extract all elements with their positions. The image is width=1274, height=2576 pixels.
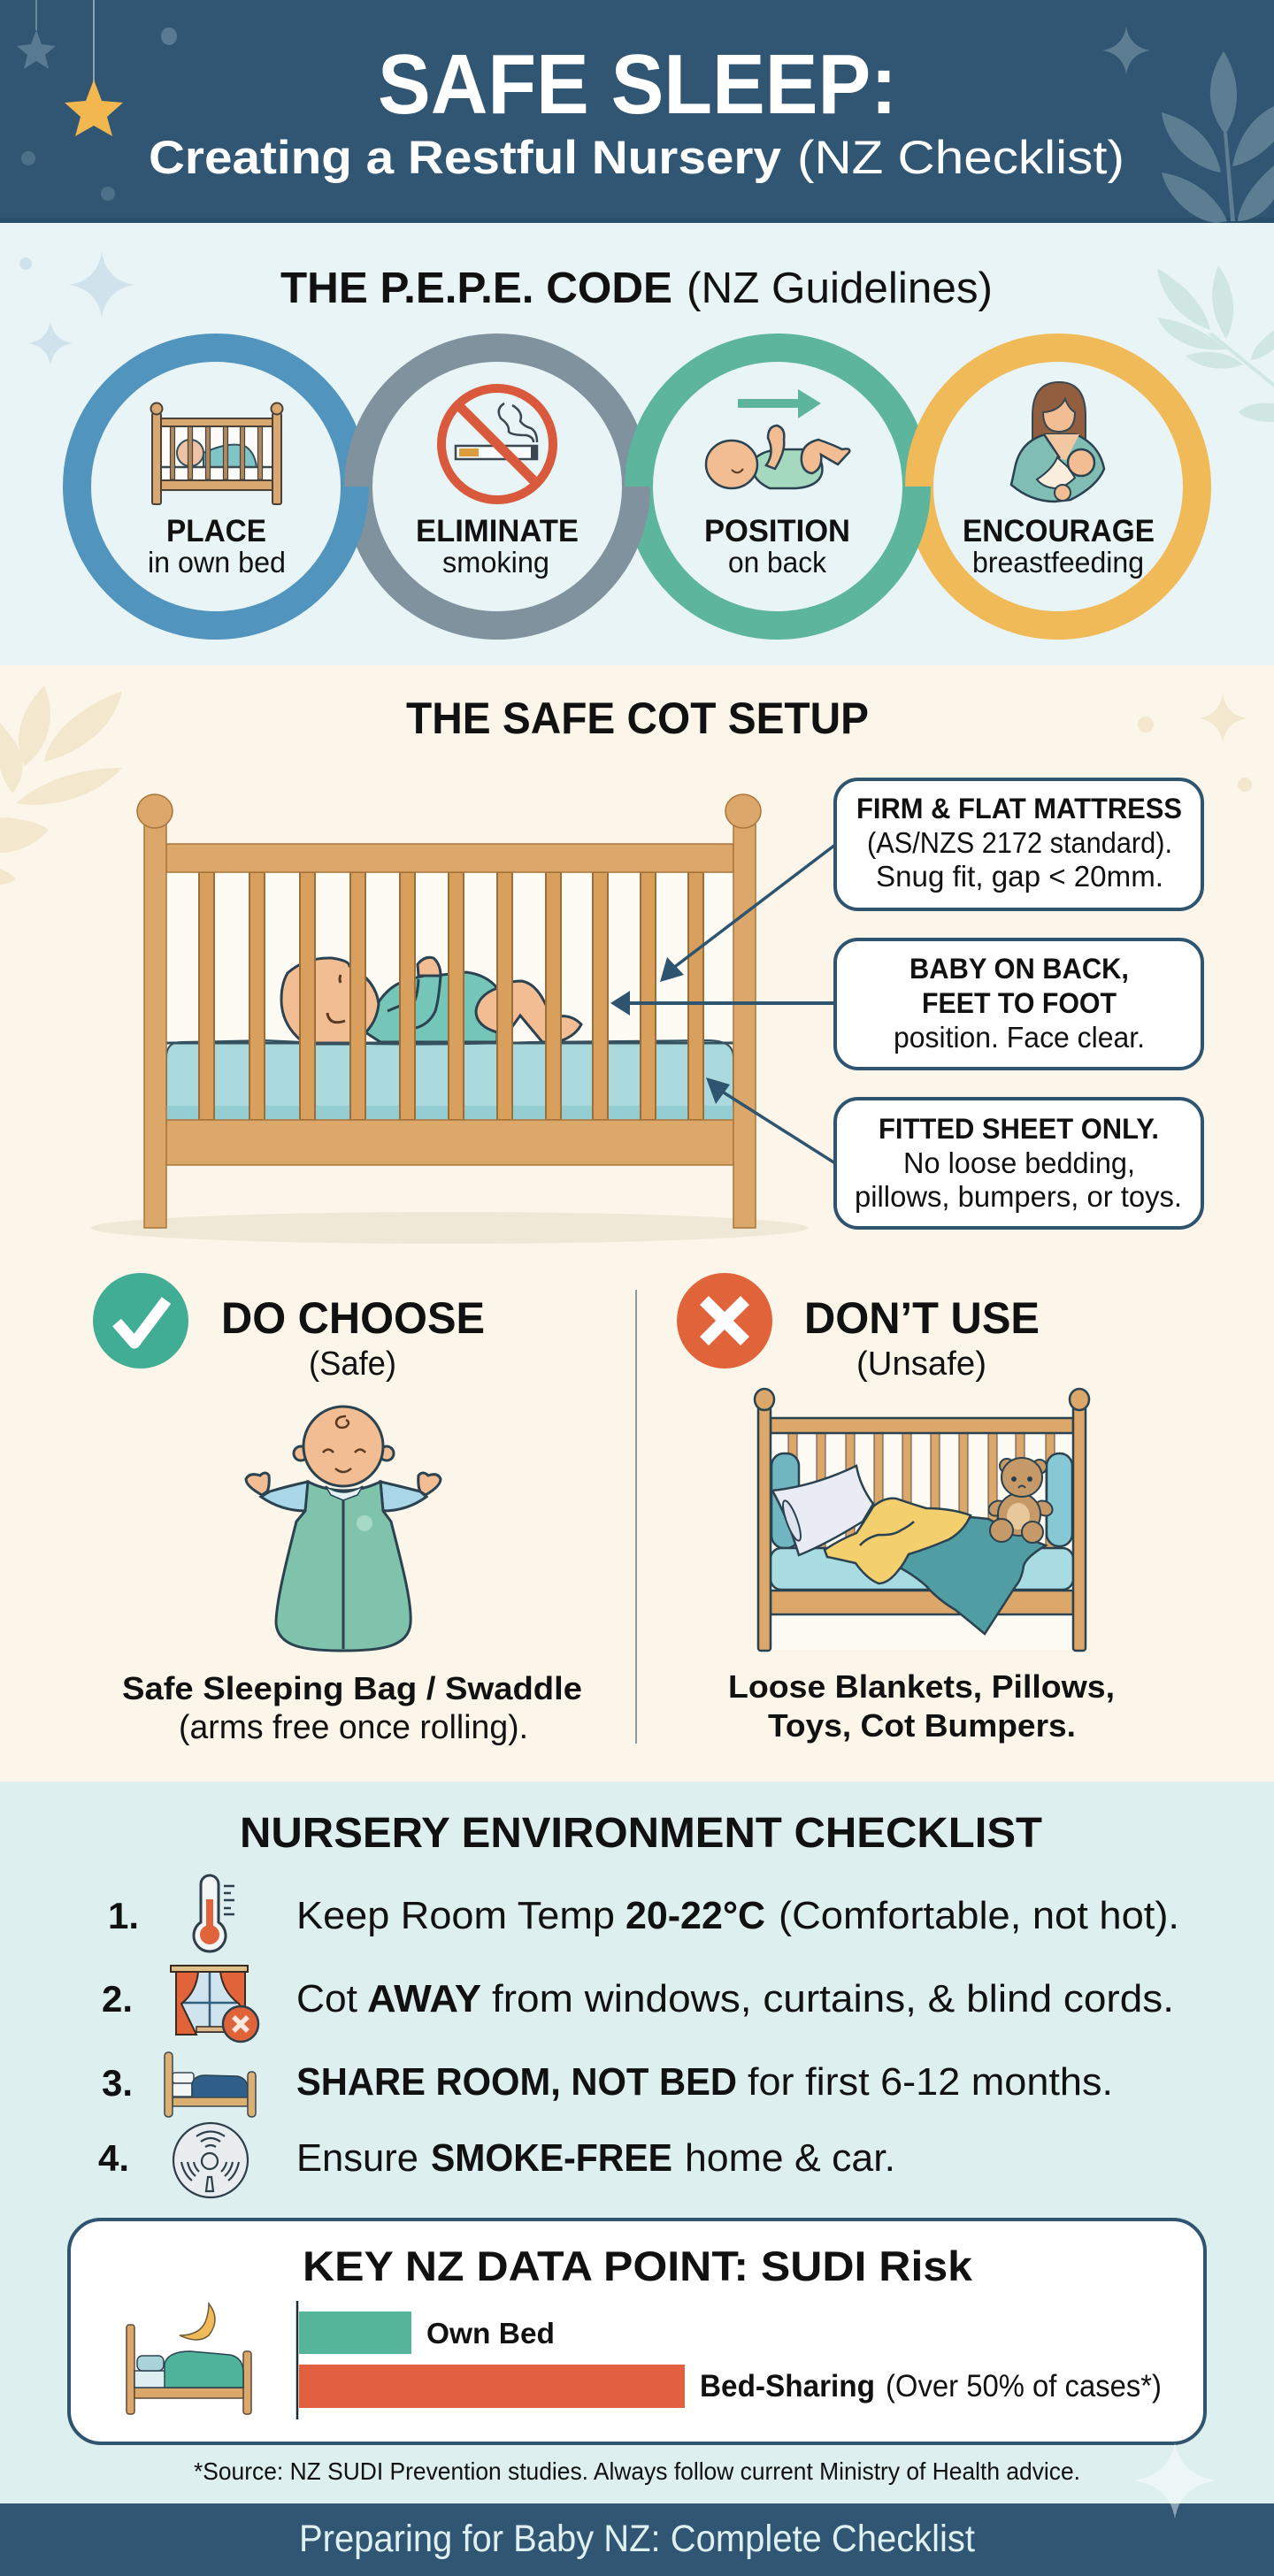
- label: eliminate: ELIMINATE: [416, 514, 579, 548]
- checklist row 3: [102, 2052, 1113, 2117]
- rails and posts: [137, 794, 761, 1228]
- subtitle: Creating a Restful Nursery: [149, 132, 782, 184]
- footer: [0, 2503, 1274, 2576]
- checklist row 1: 1.: [108, 1895, 139, 1936]
- subheading: safe: (Safe): [309, 1346, 396, 1383]
- icon: bed: [165, 2052, 256, 2117]
- callout: mattress: FIRM & FLAT MATTRESS: [856, 793, 1182, 824]
- bar: bed-sharing: [299, 2365, 1162, 2408]
- bars: [199, 872, 703, 1120]
- checklist row 4: home & car.: [685, 2136, 895, 2180]
- icon: bed with moon: [127, 2304, 251, 2414]
- label: place: [148, 514, 286, 579]
- heading: (NZ Guidelines): [687, 264, 993, 312]
- mattress: [166, 1040, 733, 1120]
- label: position: [704, 514, 850, 579]
- callout: fitted sheet: [835, 1099, 1202, 1228]
- section decoration: [19, 252, 1274, 422]
- icon: check: [93, 1273, 188, 1368]
- header decoration: hanging stars and leaves: [17, 0, 1274, 223]
- callout: fitted sheet: pillows, bumpers, or toys.: [855, 1180, 1182, 1213]
- label: position: on back: [728, 546, 826, 579]
- bumpers and mattress: [771, 1453, 1073, 1590]
- yellow blanket: [825, 1499, 971, 1583]
- heading: don't use: DON’T USE: [804, 1293, 1040, 1343]
- checklist row 4: Ensure: [296, 2136, 418, 2180]
- subheading: unsafe: (Unsafe): [856, 1346, 986, 1383]
- callout: baby on back: [835, 939, 1202, 1069]
- label: eliminate: [416, 514, 579, 579]
- panel: header banner: [0, 0, 1274, 223]
- arrow: baby position: [610, 991, 835, 1016]
- icon: breastfeeding mother: [1011, 382, 1104, 502]
- checklist row 2: Cot: [296, 1977, 357, 2020]
- icon: baby on back with arrow: [706, 389, 849, 488]
- title: SAFE SLEEP:: [378, 37, 897, 132]
- checklist row 1: (Comfortable, not hot).: [779, 1894, 1179, 1937]
- chart title: KEY NZ DATA POINT: SUDI Risk: [303, 2242, 973, 2289]
- heading: THE SAFE COT SETUP: [406, 694, 869, 743]
- checklist row 3: 3.: [102, 2062, 133, 2104]
- label: eliminate: smoking: [442, 546, 549, 579]
- icon: thermometer: [194, 1875, 234, 1951]
- panel: P.E.P.E. code: [19, 253, 1274, 640]
- checklist row 2: [102, 1966, 1174, 2042]
- checklist row 3: SHARE ROOM, NOT BED: [296, 2060, 737, 2104]
- label: position: POSITION: [704, 514, 850, 548]
- heading: NURSERY ENVIRONMENT CHECKLIST: [240, 1810, 1042, 1857]
- decoration: corner sparkle: [1133, 2442, 1216, 2518]
- callout: mattress: (AS/NZS 2172 standard).: [867, 826, 1172, 859]
- checklist row 4: SMOKE-FREE: [431, 2136, 672, 2180]
- label: place: in own bed: [148, 546, 286, 579]
- panel: safe cot setup: [0, 665, 1274, 1782]
- icon: window with cross: [171, 1966, 258, 2042]
- arrow: mattress: [660, 845, 835, 982]
- cot illustration: [91, 794, 808, 1244]
- checklist row 2: from windows, curtains, & blind cords.: [492, 1977, 1174, 2020]
- checklist row 4: 4.: [98, 2137, 129, 2179]
- checklist row 1: [108, 1875, 1179, 1951]
- caption: [122, 1670, 582, 1746]
- checklist row 4: [98, 2123, 895, 2197]
- baby: [281, 957, 581, 1044]
- caption: Safe Sleeping Bag / Swaddle: [122, 1670, 582, 1706]
- pillow: [772, 1466, 873, 1555]
- heading: THE P.E.P.E. CODE: [280, 264, 672, 312]
- interlocking rings: [77, 348, 1197, 625]
- callout: baby on back: FEET TO FOOT: [922, 987, 1117, 1019]
- caption: Loose Blankets, Pillows,: [728, 1668, 1115, 1705]
- arrow: fitted sheet: [706, 1077, 835, 1163]
- caption: [728, 1668, 1115, 1744]
- illustration: unsafe cot: [755, 1389, 1089, 1651]
- section decoration: [0, 686, 1252, 885]
- heading: do choose: DO CHOOSE: [221, 1293, 485, 1343]
- checklist row 2: AWAY: [367, 1977, 481, 2020]
- label: encourage: [963, 514, 1155, 579]
- icon: smoke alarm: [173, 2123, 248, 2197]
- subtitle: (NZ Checklist): [797, 132, 1124, 184]
- panel: don't use: [677, 1273, 1115, 1744]
- label: encourage: breastfeeding: [972, 546, 1144, 579]
- checklist row 2: 2.: [102, 1978, 133, 2020]
- bar: own bed: Own Bed: [426, 2317, 555, 2350]
- label: encourage: ENCOURAGE: [963, 514, 1155, 548]
- bar: bed-sharing: (Over 50% of cases*): [886, 2369, 1162, 2404]
- callout: mattress: Snug fit, gap < 20mm.: [876, 860, 1163, 893]
- callout: baby on back: position. Face clear.: [894, 1021, 1145, 1054]
- icon: cross: [677, 1273, 772, 1368]
- icon: no smoking: [441, 388, 553, 500]
- teal blanket: [900, 1517, 1046, 1634]
- panel: do choose: [93, 1273, 582, 1746]
- icon: cot: [150, 403, 283, 504]
- callout: fitted sheet: No loose bedding,: [903, 1146, 1135, 1179]
- panel: key NZ data point: [69, 2220, 1205, 2443]
- panel: nursery environment checklist: [0, 1782, 1274, 2503]
- illustration: baby in sleeping bag: [246, 1407, 441, 1651]
- callout: mattress: [835, 779, 1202, 909]
- callout: fitted sheet: FITTED SHEET ONLY.: [879, 1113, 1159, 1145]
- caption: Toys, Cot Bumpers.: [768, 1707, 1076, 1744]
- footnote: *Source: NZ SUDI Prevention studies. Always follow current Ministry of Health advice.: [194, 2457, 1080, 2485]
- footer: Preparing for Baby NZ: Complete Checklist: [299, 2518, 975, 2560]
- caption: (arms free once rolling).: [179, 1709, 528, 1746]
- bar chart: [297, 2301, 1162, 2419]
- checklist row 1: Keep Room Temp: [296, 1894, 615, 1937]
- checklist row 1: 20-22°C: [625, 1894, 765, 1937]
- checklist row 3: for first 6-12 months.: [748, 2060, 1113, 2104]
- bar: own bed: [299, 2312, 555, 2354]
- label: place: PLACE: [166, 514, 266, 548]
- teddy bear: [986, 1458, 1055, 1543]
- bar: bed-sharing: Bed-Sharing: [700, 2369, 875, 2404]
- callout: baby on back: BABY ON BACK,: [909, 953, 1129, 985]
- rails and posts: [755, 1389, 1089, 1651]
